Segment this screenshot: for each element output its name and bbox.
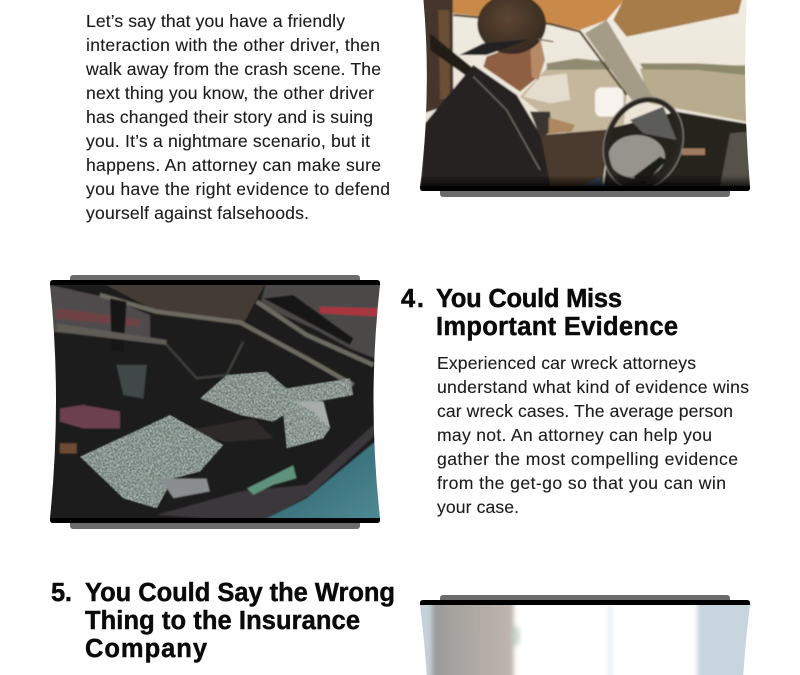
photo: bright blurred window scene bbox=[410, 595, 760, 675]
heading: reason 4 bbox=[401, 285, 678, 341]
text block: evidence paragraph: gather the most compelling evidence bbox=[437, 449, 738, 469]
photo: man driving a truck bbox=[410, 0, 760, 202]
heading: reason 5: 5. bbox=[51, 579, 72, 607]
text block: evidence paragraph: Experienced car wreck attorneys bbox=[437, 353, 696, 373]
text block: friendly interaction paragraph: has changed their story and is suing bbox=[86, 107, 373, 127]
text block: friendly interaction paragraph: yourself against falsehoods. bbox=[86, 203, 309, 223]
heading: reason 4: You Could Miss bbox=[436, 285, 622, 313]
text block: evidence paragraph: car wreck cases. The average person bbox=[437, 401, 733, 421]
text block: friendly interaction paragraph: walk away from the crash scene. The bbox=[85, 59, 381, 79]
text block: evidence paragraph bbox=[437, 353, 749, 517]
text block: evidence paragraph: your case. bbox=[437, 497, 519, 517]
text block: evidence paragraph: from the get-go so that you can win bbox=[437, 473, 726, 493]
heading: reason 5: Company bbox=[85, 635, 208, 663]
heading: reason 5: Thing to the Insurance bbox=[85, 607, 360, 635]
text block: evidence paragraph: understand what kind of evidence wins bbox=[437, 377, 749, 397]
text block: friendly interaction paragraph bbox=[85, 11, 390, 223]
text block: friendly interaction paragraph: you have the right evidence to defend bbox=[86, 179, 390, 199]
heading: reason 4: Important Evidence bbox=[436, 313, 678, 341]
text block: friendly interaction paragraph: interaction with the other driver, then bbox=[86, 35, 380, 55]
glass speckle patches bbox=[80, 372, 353, 508]
heading: reason 5: You Could Say the Wrong bbox=[85, 579, 395, 607]
text block: evidence paragraph: may not. An attorney can help you bbox=[437, 425, 712, 445]
text block: friendly interaction paragraph: happens. An attorney can make sure bbox=[86, 155, 381, 175]
photo: shattered car windshield bbox=[40, 275, 390, 529]
heading: reason 5 bbox=[51, 579, 395, 663]
text block: friendly interaction paragraph: next thing you know, the other driver bbox=[86, 83, 374, 103]
text block: friendly interaction paragraph: you. It’s a nightmare scenario, but it bbox=[86, 131, 370, 151]
heading: reason 4: 4. bbox=[401, 285, 424, 313]
text block: friendly interaction paragraph: Let’s say that you have a friendly bbox=[86, 11, 345, 31]
